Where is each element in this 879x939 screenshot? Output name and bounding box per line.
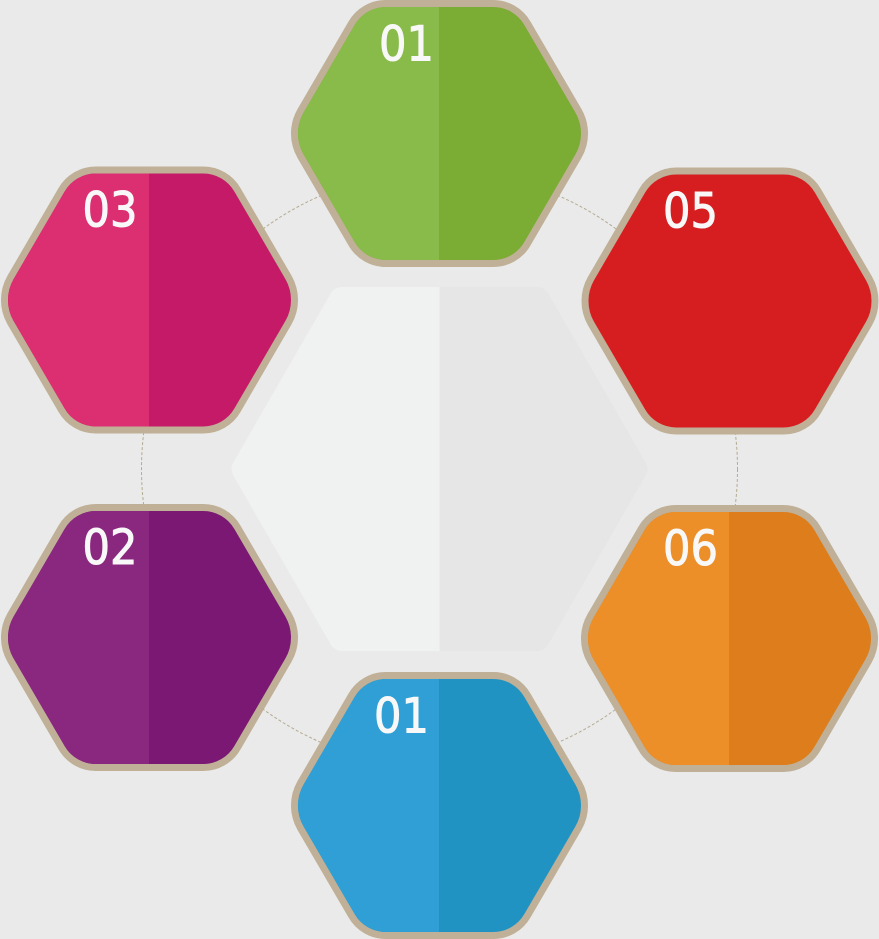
number 01: 01 (374, 688, 429, 744)
connecting dotted ring (142, 171, 738, 767)
hexagon 06 orange (588, 512, 871, 765)
central pale hexagon (232, 287, 648, 651)
number 05: 05 (663, 184, 718, 240)
number 06: 06 (663, 521, 718, 577)
hexagon 02 purple (8, 511, 291, 764)
number 03: 03 (82, 182, 138, 238)
hexagon 03 pink (8, 173, 291, 427)
hexagon 05 red (588, 174, 872, 428)
hexagon 01 green (298, 7, 581, 260)
number 02: 02 (82, 520, 138, 576)
number 01: 01 (379, 16, 434, 72)
hexagon 01 blue (298, 679, 581, 932)
